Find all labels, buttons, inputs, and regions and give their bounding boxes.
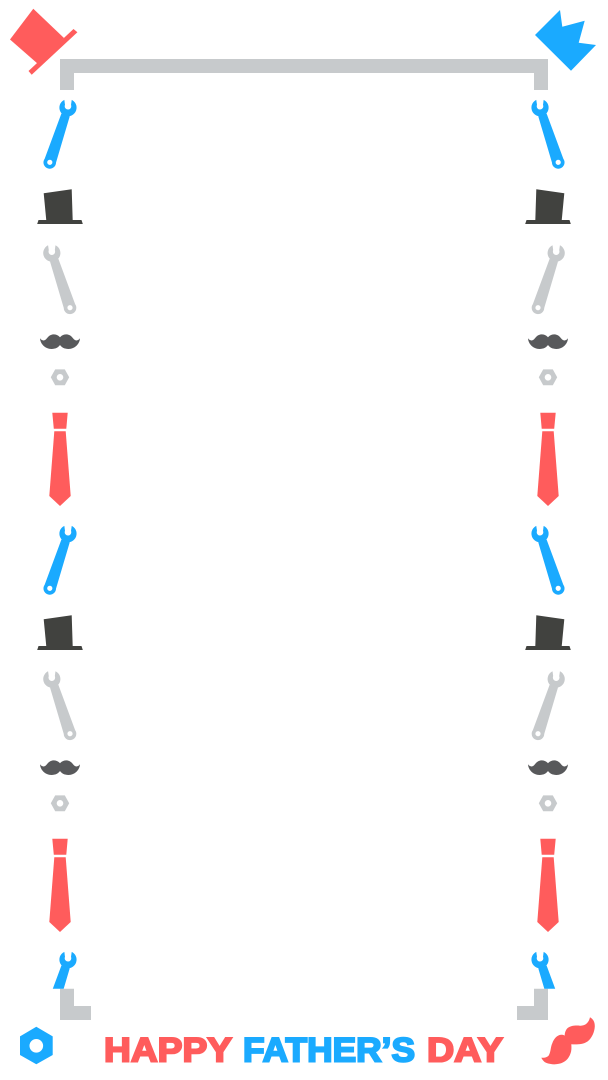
icon: blue crown [535, 10, 596, 71]
icon: grey wrench left 2 [40, 666, 80, 743]
icon: grey wrench right 1 [528, 240, 568, 317]
left border column [37, 95, 83, 1023]
icon: black hat right 2 [525, 615, 571, 650]
icon: red top hat [10, 9, 77, 75]
icon: moustache right 2 [528, 760, 568, 775]
icon: nut left 2 [51, 795, 69, 811]
frame bottom right corner [517, 989, 548, 1020]
icon: black hat left 2 [37, 615, 83, 650]
frame bottom left corner [60, 989, 91, 1020]
icon: nut right 1 [539, 369, 557, 385]
icon: blue hex nut [20, 1027, 53, 1064]
icon: grey wrench right 2 [528, 666, 568, 743]
title: Happy Father's Day [104, 1032, 503, 1070]
icon: red moustache [541, 1017, 595, 1064]
icon: blue wrench right 2 [528, 521, 568, 597]
icon: red tie left 1 [49, 413, 71, 506]
title: Happy Father's Day: DAY [427, 1032, 503, 1070]
icon: moustache left 2 [40, 760, 80, 775]
icon: red tie right 1 [537, 413, 559, 506]
icon: nut right 2 [539, 795, 557, 811]
right border column [525, 95, 571, 1023]
icon: black hat left 1 [37, 189, 83, 224]
title: Happy Father's Day: FATHER’S [243, 1032, 415, 1070]
icon: black hat right 1 [525, 189, 571, 224]
icon: blue wrench right 3 clipped [531, 952, 556, 989]
icon: red tie left 2 [49, 839, 71, 932]
title: Happy Father's Day: HAPPY [104, 1032, 232, 1070]
icon: red tie right 2 [537, 839, 559, 932]
icon: nut left 1 [51, 369, 69, 385]
icon: blue wrench right 1 [528, 95, 568, 171]
icon: blue wrench left 2 [40, 521, 80, 597]
icon: grey wrench left 1 [40, 240, 80, 317]
icon: moustache left 1 [40, 334, 80, 349]
icon: blue wrench left 3 clipped [52, 952, 77, 989]
frame top bracket [60, 59, 548, 90]
icon: moustache right 1 [528, 334, 568, 349]
icon: blue wrench left 1 [40, 95, 80, 171]
